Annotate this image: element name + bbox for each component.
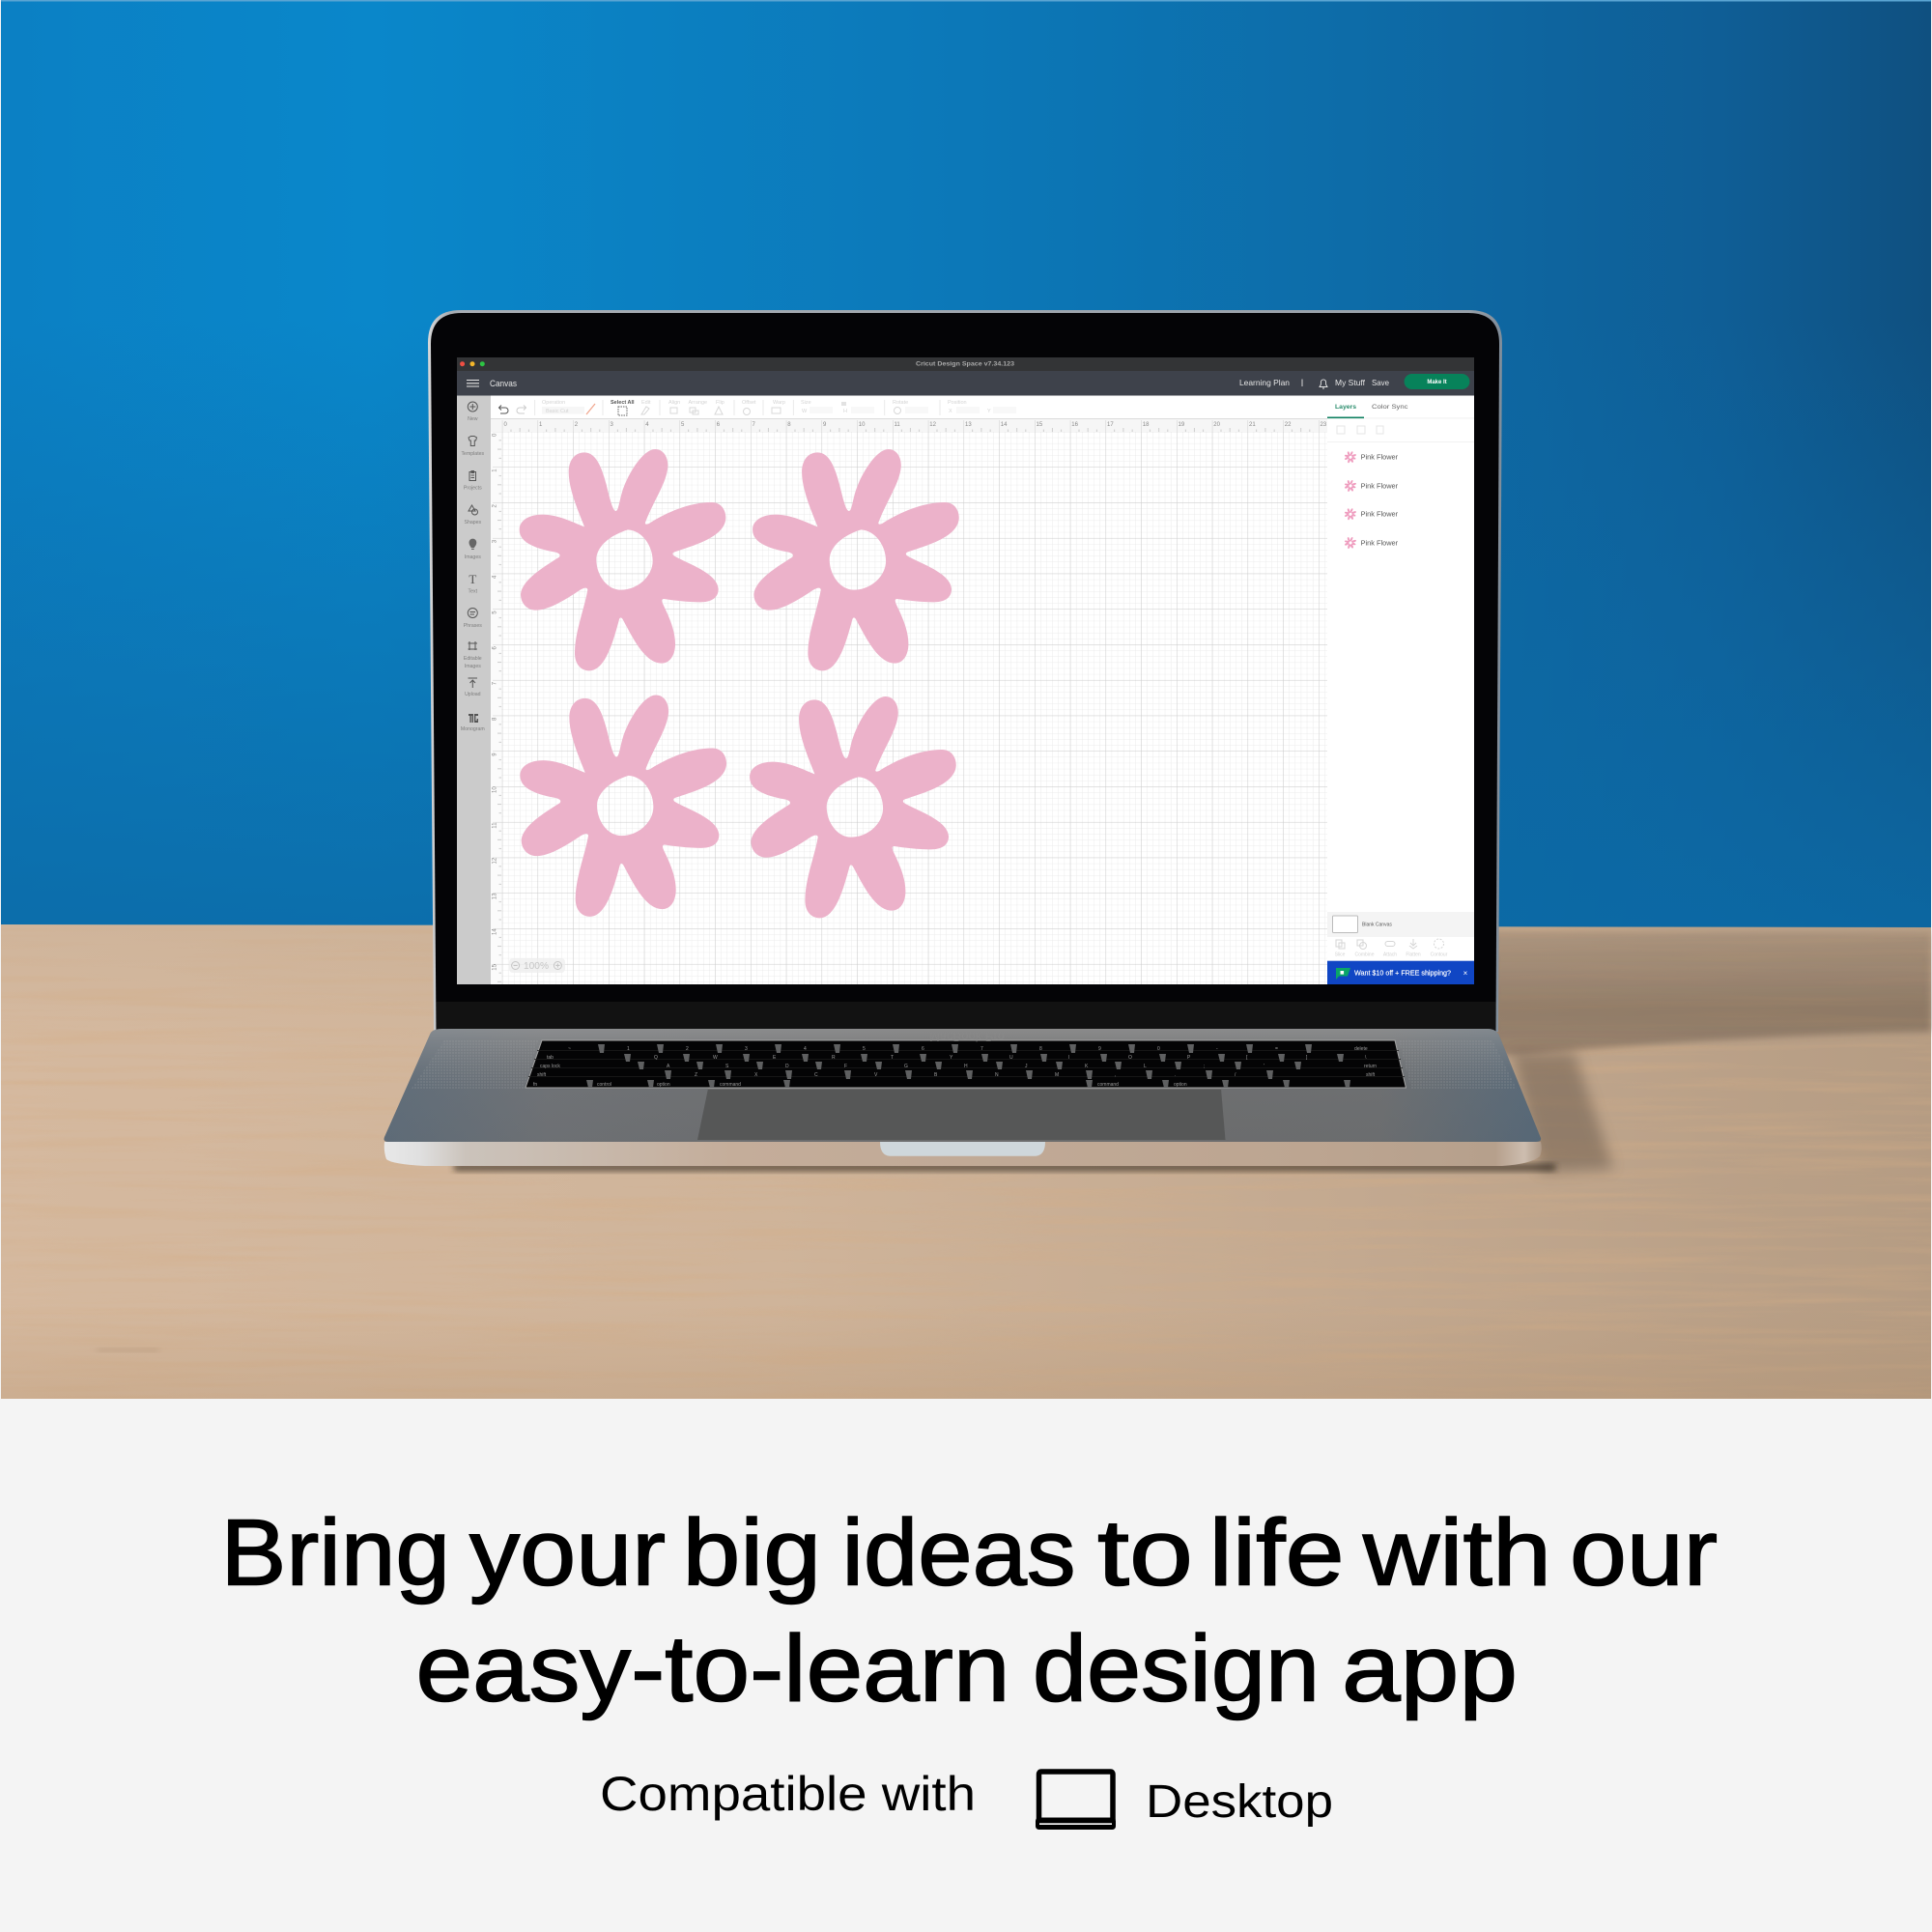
bottom caption background xyxy=(0,1399,1932,1932)
key legends: ~1234567890-= xyxy=(568,1046,1278,1052)
canvas rulers: 14 xyxy=(493,928,498,935)
layer row xyxy=(1345,508,1399,520)
layer action tools: Attach xyxy=(1383,952,1397,958)
layer row: Pink Flower xyxy=(1361,540,1399,547)
layer action tools xyxy=(1335,939,1448,958)
left tool sidebar: New xyxy=(468,416,478,422)
edit toolbar: Align xyxy=(668,400,680,406)
edit toolbar: X xyxy=(949,409,952,414)
promo banner: × xyxy=(1463,969,1468,978)
canvas rulers: 3 xyxy=(611,422,614,428)
canvas rulers: 5 xyxy=(493,611,498,614)
key legends: command xyxy=(1097,1082,1119,1088)
canvas rulers: 16 xyxy=(1071,422,1079,428)
left tool sidebar: Phrases xyxy=(464,623,482,629)
left tool sidebar: Shapes xyxy=(464,520,481,526)
edit toolbar: Y xyxy=(987,409,991,414)
key legends: tab xyxy=(547,1055,554,1061)
heading: to xyxy=(1097,1500,1193,1605)
key stems xyxy=(586,1044,1350,1088)
canvas rulers: 7 xyxy=(493,681,498,685)
canvas rulers: 10 xyxy=(493,786,498,793)
canvas rulers: 8 xyxy=(787,422,791,428)
reflected model name: MacBook Pro xyxy=(929,1030,1005,1044)
canvas rulers: 7 xyxy=(752,422,755,428)
header bar: Save xyxy=(1372,378,1389,387)
key legends: shift xyxy=(1366,1072,1376,1078)
title bar xyxy=(457,357,1474,371)
canvas rulers: 20 xyxy=(1213,422,1221,428)
key legends: command xyxy=(720,1082,741,1088)
pink flower bottom right xyxy=(750,696,956,918)
canvas rulers: 19 xyxy=(1179,422,1185,428)
left tool sidebar: Monogram xyxy=(461,726,485,732)
canvas rulers: 13 xyxy=(965,422,972,428)
edit toolbar: Offset xyxy=(742,400,756,406)
zoom control xyxy=(509,958,565,973)
canvas rulers: 5 xyxy=(681,422,685,428)
icon: laptop xyxy=(1036,1772,1116,1830)
blank canvas row: Blank Canvas xyxy=(1362,923,1392,928)
header bar: Canvas xyxy=(490,379,517,388)
edit toolbar: Warp xyxy=(773,400,785,406)
canvas rulers: 4 xyxy=(493,575,498,579)
front edge xyxy=(384,1142,1542,1166)
canvas rulers: 0 xyxy=(493,433,498,437)
heading: with xyxy=(1362,1500,1551,1605)
edit toolbar: Basic Cut xyxy=(546,409,569,414)
left tool sidebar: Images xyxy=(465,554,481,560)
edit toolbar: Size xyxy=(801,400,811,406)
key legends: return xyxy=(1364,1064,1377,1069)
canvas rulers: 0 xyxy=(504,422,508,428)
heading: life xyxy=(1209,1500,1345,1605)
left tool sidebar: Upload xyxy=(465,692,481,697)
layers panel xyxy=(1327,396,1474,984)
key legends: ASDFGHJKL;' xyxy=(667,1064,1264,1069)
left tool sidebar: Images xyxy=(465,664,481,669)
edit toolbar: Flip xyxy=(716,400,724,406)
canvas rulers xyxy=(491,419,1327,984)
layer row: Pink Flower xyxy=(1361,512,1399,519)
speaker grill left xyxy=(412,1040,538,1089)
heading: big xyxy=(682,1500,821,1605)
key legends xyxy=(533,1046,1377,1088)
edit toolbar: W xyxy=(802,409,808,414)
pink flower bottom left xyxy=(520,695,726,917)
wooden desk xyxy=(1,924,1931,1399)
title bar: Cricut Design Space v7.34.123 xyxy=(916,361,1015,367)
edit toolbar: Edit xyxy=(641,400,651,406)
heading: Bring xyxy=(220,1500,450,1605)
promo banner: Want $10 off + FREE shipping? xyxy=(1354,968,1451,978)
edit toolbar: Position xyxy=(948,400,967,406)
pink flower top left xyxy=(520,449,725,670)
app window: Cricut Design Space xyxy=(457,357,1474,984)
pink flower top right xyxy=(753,449,959,670)
canvas rulers: 9 xyxy=(493,753,498,756)
heading: app xyxy=(1342,1616,1518,1721)
key legends: option xyxy=(1174,1082,1187,1088)
edit toolbar: Arrange xyxy=(688,400,707,406)
canvas rulers: 8 xyxy=(493,717,498,721)
header bar: Learning Plan xyxy=(1239,378,1290,387)
layer row xyxy=(1345,480,1399,492)
left tool sidebar: T xyxy=(469,572,476,586)
laptop shadow on desk xyxy=(454,931,1931,1173)
canvas grid xyxy=(501,432,1327,984)
left tool sidebar: Templates xyxy=(461,451,485,457)
heading: design xyxy=(1033,1616,1320,1721)
canvas rulers: 9 xyxy=(823,422,827,428)
canvas rulers: 10 xyxy=(859,422,866,428)
layer row xyxy=(1345,537,1399,549)
canvas rulers: 1 xyxy=(539,422,543,428)
key legends: delete xyxy=(1354,1046,1368,1052)
edit toolbar: Select All xyxy=(611,400,635,406)
key legends: shift xyxy=(537,1072,547,1078)
canvas rulers: 6 xyxy=(717,422,721,428)
blue wall xyxy=(1,0,1931,931)
canvas rulers: 12 xyxy=(493,857,498,864)
layer action tools: Flatten xyxy=(1406,952,1421,958)
left tool sidebar: Text xyxy=(469,589,478,595)
canvas rulers: 6 xyxy=(493,645,498,649)
make it button: Make It xyxy=(1427,380,1447,385)
heading xyxy=(220,1500,1718,1721)
canvas rulers: 21 xyxy=(1249,422,1256,428)
canvas rulers: 2 xyxy=(575,422,579,428)
layer row xyxy=(1345,451,1399,463)
edit toolbar xyxy=(491,396,1327,419)
heading: easy-to-learn xyxy=(415,1616,1010,1721)
canvas rulers: 15 xyxy=(1036,422,1043,428)
header bar xyxy=(457,371,1474,396)
heading: our xyxy=(1570,1500,1718,1605)
laptop xyxy=(384,310,1542,1166)
laptop lid xyxy=(428,310,1502,1032)
heading: ideas xyxy=(842,1500,1076,1605)
key legends: fn xyxy=(533,1082,537,1088)
lid-open notch xyxy=(880,1142,1045,1156)
canvas rulers: 13 xyxy=(493,893,498,899)
heading: your xyxy=(469,1500,666,1605)
key legends: option xyxy=(657,1082,670,1088)
canvas rulers: 15 xyxy=(493,963,498,971)
blank canvas row xyxy=(1327,912,1474,937)
keyboard xyxy=(526,1040,1406,1088)
canvas rulers: 11 xyxy=(493,822,498,829)
canvas rulers: 4 xyxy=(645,422,649,428)
zoom control: 100% xyxy=(524,961,549,972)
key legends: caps lock xyxy=(540,1064,560,1069)
canvas rulers: 1 xyxy=(493,469,498,472)
layer row: Pink Flower xyxy=(1361,483,1399,490)
layer action tools: Slice xyxy=(1335,952,1346,958)
make it button xyxy=(1405,374,1469,389)
left tool sidebar xyxy=(457,396,491,984)
edit toolbar: Rotate xyxy=(893,400,908,406)
layers panel: Layers xyxy=(1335,404,1356,411)
layer row: Pink Flower xyxy=(1361,455,1399,462)
key legends: ZXCVBNM,./ xyxy=(695,1072,1236,1078)
desktop label: Desktop xyxy=(1146,1776,1333,1828)
layers panel: Color Sync xyxy=(1372,404,1408,411)
edit toolbar: H xyxy=(843,409,847,414)
promo banner xyxy=(1327,961,1474,984)
canvas rulers: 3 xyxy=(493,539,498,543)
canvas rulers: 18 xyxy=(1143,422,1150,428)
key legends: QWERTYUIOP[]\ xyxy=(654,1055,1367,1061)
canvas rulers: 14 xyxy=(1001,422,1008,428)
key legends: control xyxy=(597,1082,611,1088)
canvas rulers: 17 xyxy=(1107,422,1114,428)
header bar: My Stuff xyxy=(1335,378,1366,387)
canvas rulers: 22 xyxy=(1285,422,1292,428)
speaker grill right xyxy=(1399,1040,1517,1089)
compatible with label: Compatible with xyxy=(600,1767,976,1821)
layer action tools: Combine xyxy=(1354,952,1375,958)
left tool sidebar: Projects xyxy=(464,485,482,491)
layer action tools: Contour xyxy=(1431,952,1448,958)
canvas rulers: 12 xyxy=(929,422,937,428)
left tool sidebar: Editable xyxy=(464,656,482,662)
canvas rulers: 23 xyxy=(1320,422,1327,428)
laptop base xyxy=(384,1029,1542,1166)
canvas rulers: 11 xyxy=(895,422,900,428)
trackpad xyxy=(697,1089,1225,1140)
edit toolbar: Operation xyxy=(542,400,565,406)
canvas rulers: 2 xyxy=(493,504,498,508)
